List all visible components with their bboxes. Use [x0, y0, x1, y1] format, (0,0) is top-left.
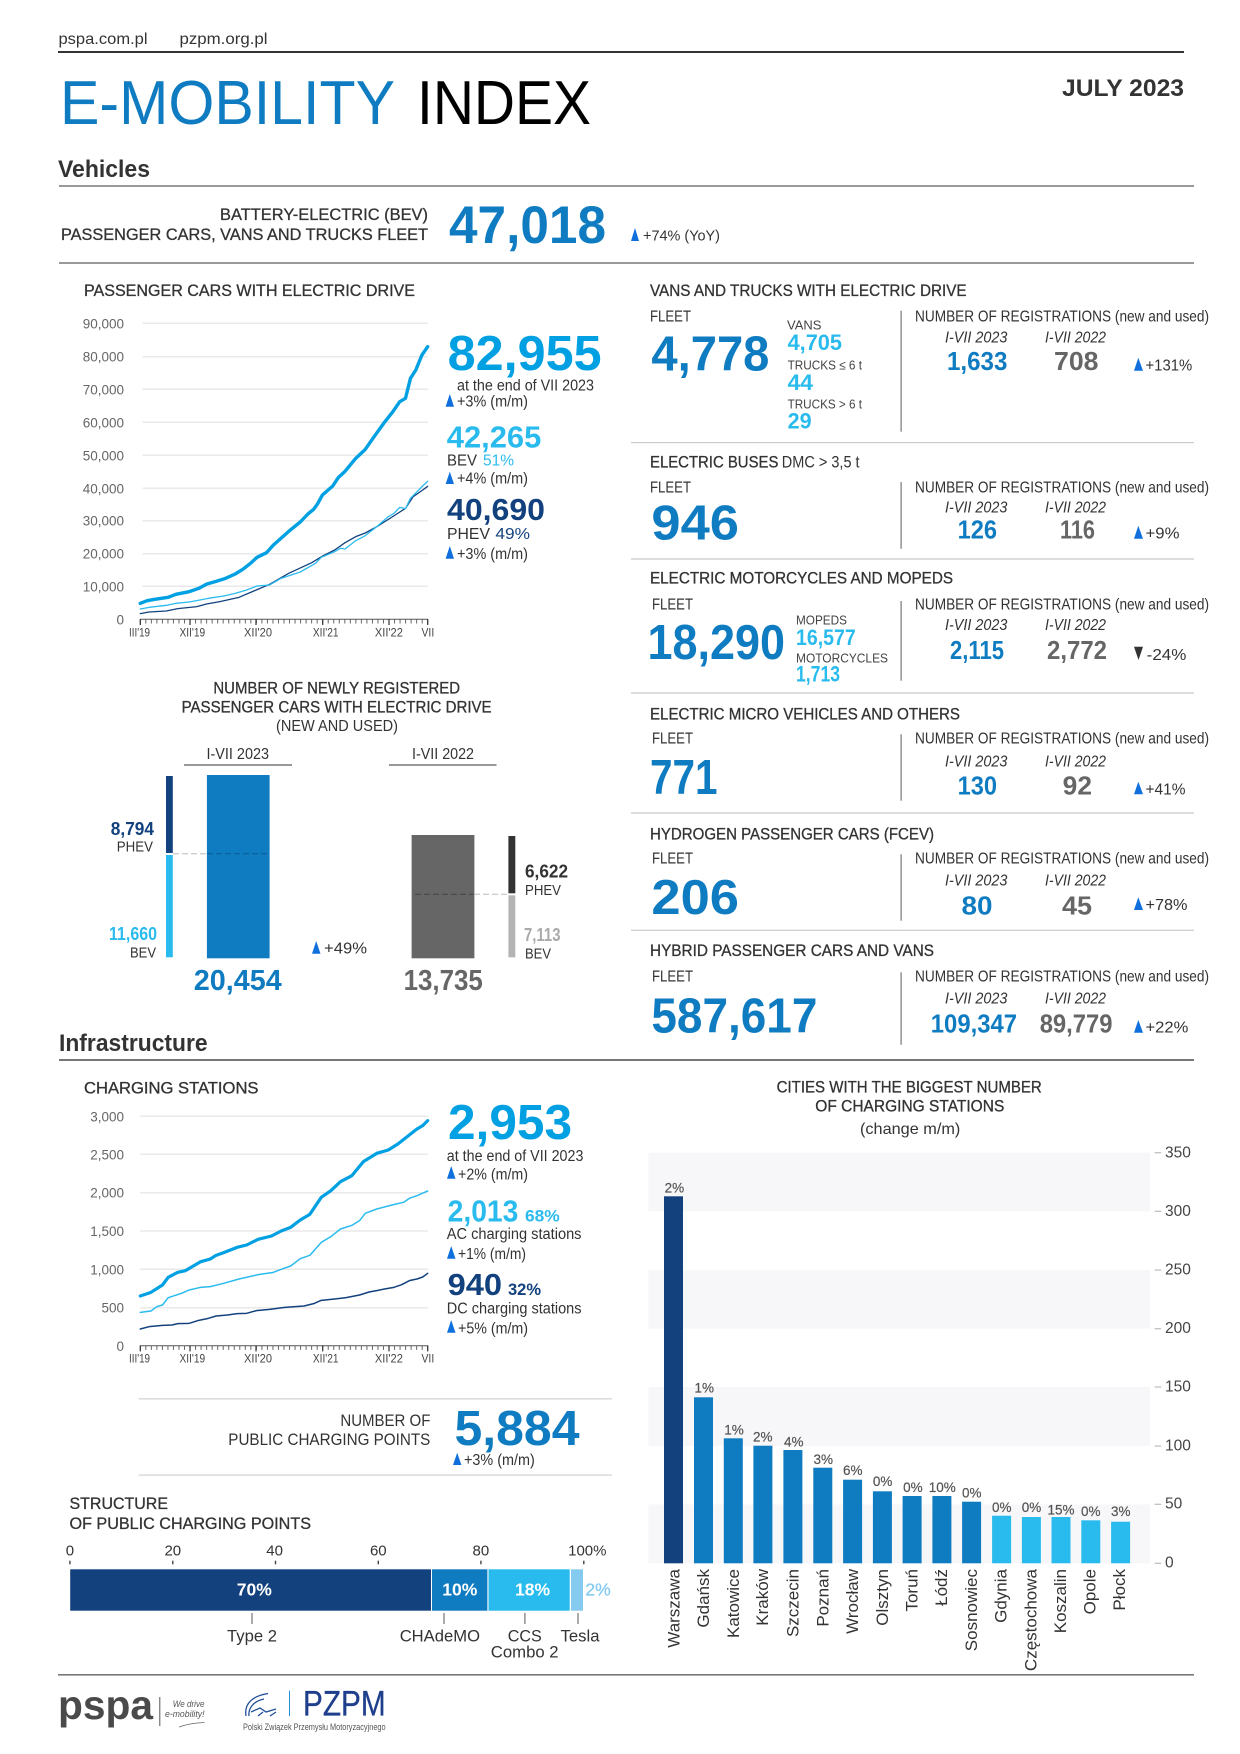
line chart: passenger cars: 40,000: [83, 481, 124, 496]
city names: Warszawa: [664, 1568, 684, 1648]
registrations: I-VII 2023: [945, 617, 1008, 634]
change labels: 0%: [873, 1474, 892, 1489]
title: INDEX: [417, 69, 591, 138]
logo: PSPA: pspa: [58, 1682, 154, 1728]
registrations: I-VII 2022: [1045, 872, 1106, 889]
stacked bar: 2%: [585, 1580, 611, 1600]
line chart: passenger cars: III'19: [129, 626, 150, 640]
city names: Łódź: [932, 1569, 951, 1606]
line chart: passenger cars: 50,000: [83, 448, 124, 463]
bars: I-VII 2023: 8,794: [111, 819, 154, 839]
change labels: 0%: [1081, 1504, 1101, 1519]
bar chart: cities: 250: [1165, 1262, 1191, 1279]
panel: vans and trucks: [650, 282, 1209, 433]
registrations: 1,633: [947, 346, 1007, 376]
city names: Kraków: [753, 1568, 772, 1626]
panel: vans and trucks: VANS AND TRUCKS WITH ELECTRIC DRIVE: [650, 282, 967, 300]
panel: hydrogen cars: [650, 825, 1209, 925]
change labels: 2%: [753, 1430, 773, 1445]
public charging points: [228, 1402, 580, 1469]
bars: I-VII 2022: 6,622: [525, 861, 568, 881]
bars: I-VII 2022: [389, 746, 568, 997]
city names: Opole: [1080, 1569, 1100, 1614]
change labels: 2%: [665, 1181, 684, 1196]
city names: Poznań: [814, 1569, 832, 1627]
panel: hydrogen cars: FLEET: [652, 850, 693, 867]
fleet breakdown: MOPEDS: [796, 612, 847, 627]
registrations: I-VII 2023: [945, 872, 1008, 889]
PHEV value: [446, 492, 545, 563]
line chart: passenger cars: XII'22: [375, 626, 403, 640]
panel: charging stations: [84, 1079, 583, 1366]
PHEV value: +3% (m/m): [457, 546, 528, 563]
line chart: charging stations: XII'20: [244, 1352, 272, 1366]
bar chart: cities: [648, 1145, 1191, 1671]
panel: hybrid cars and vans: FLEET: [652, 969, 693, 986]
logo: PSPA: We drive: [173, 1699, 204, 1709]
bar chart: cities: 50: [1165, 1496, 1183, 1513]
BEV fleet headline: [61, 196, 720, 255]
registrations: I-VII 2022: [1045, 990, 1106, 1007]
bar chart: cities: 150: [1165, 1378, 1191, 1396]
AC stations value: [447, 1194, 582, 1263]
bar chart: cities: 300: [1165, 1203, 1191, 1220]
registrations: [915, 309, 1209, 376]
bars: I-VII 2022: I-VII 2022: [412, 746, 474, 763]
stacked bar: 18%: [515, 1580, 550, 1600]
line chart: charging stations: 0: [116, 1339, 124, 1354]
change labels: 1%: [724, 1422, 744, 1437]
line chart: charging stations: 2,000: [90, 1186, 124, 1201]
DC stations value: +5% (m/m): [458, 1320, 528, 1337]
logo: PZPM: Polski Związek Przemysłu Motoryzacyjnego: [243, 1722, 386, 1732]
BEV fleet headline: BATTERY-ELECTRIC (BEV): [220, 206, 428, 224]
panel: micro vehicles: [650, 705, 1209, 805]
registrations: +9%: [1146, 526, 1180, 543]
stacked bar: [70, 1569, 611, 1611]
panel: newly registered passenger cars: NUMBER OF NEWLY REGISTERED: [213, 679, 460, 697]
line chart: charging stations: 2,500: [90, 1147, 124, 1162]
line chart: passenger cars: 20,000: [83, 547, 124, 562]
panel: motorcycles and mopeds: ELECTRIC MOTORCYCLES AND MOPEDS: [650, 569, 953, 587]
fleet breakdown: [796, 612, 888, 687]
registrations: [915, 969, 1209, 1039]
city names: Szczecin: [784, 1569, 802, 1637]
AC stations value: 68%: [525, 1207, 560, 1226]
registrations: I-VII 2022: [1045, 329, 1106, 346]
change labels: [665, 1181, 1130, 1519]
panel: hybrid cars and vans: 587,617: [651, 990, 817, 1044]
AC stations value: AC charging stations: [447, 1226, 582, 1243]
panel: structure of public charging points: STRUCTURE: [70, 1495, 168, 1513]
panel: passenger cars with electric drive: [83, 282, 602, 640]
change labels: 0%: [962, 1486, 982, 1501]
axis: 80: [473, 1543, 489, 1560]
city names: Gdynia: [992, 1568, 1010, 1623]
panel: electric buses: 946: [651, 496, 739, 550]
DC stations value: 940: [448, 1267, 502, 1302]
registrations: [915, 596, 1209, 665]
fleet breakdown: [787, 317, 862, 433]
registrations: 126: [958, 515, 997, 545]
registrations: I-VII 2022: [1045, 753, 1106, 770]
change labels: 4%: [784, 1435, 804, 1450]
registrations: 116: [1060, 515, 1095, 545]
registrations: I-VII 2023: [945, 990, 1008, 1007]
line chart: passenger cars: VII: [422, 626, 434, 640]
panel: newly registered passenger cars: PASSENGER CARS WITH ELECTRIC DRIVE: [182, 698, 492, 716]
panel: cities with the biggest number of charging stations: (change m/m): [860, 1121, 960, 1138]
registrations: +131%: [1146, 358, 1192, 375]
registrations: I-VII 2023: [945, 329, 1008, 346]
city names: Katowice: [724, 1569, 743, 1638]
panel: vans and trucks: FLEET: [650, 309, 691, 326]
panel: cities with the biggest number of charging stations: [648, 1079, 1191, 1671]
total fleet value: at the end of VII 2023: [457, 378, 594, 395]
BEV value: 51%: [483, 453, 514, 470]
line chart: passenger cars: 60,000: [83, 415, 124, 430]
bars: I-VII 2022: 13,735: [404, 965, 483, 997]
registrations: +78%: [1146, 897, 1188, 914]
title: E-MOBILITY: [60, 69, 395, 138]
BEV fleet headline: PASSENGER CARS, VANS AND TRUCKS FLEET: [61, 226, 428, 244]
line chart: passenger cars: 10,000: [83, 579, 124, 594]
line chart: charging stations: XII'21: [313, 1352, 339, 1366]
panel: micro vehicles: 771: [650, 751, 718, 805]
line chart: passenger cars: 80,000: [83, 350, 124, 365]
public charging points: NUMBER OF: [340, 1412, 430, 1430]
panel: hybrid cars and vans: HYBRID PASSENGER CARS AND VANS: [650, 942, 934, 960]
fleet breakdown: 44: [788, 370, 814, 395]
registrations: 109,347: [931, 1009, 1017, 1039]
registrations: 45: [1062, 890, 1092, 920]
city names: Częstochowa: [1022, 1568, 1040, 1671]
city names: Olsztyn: [873, 1569, 892, 1626]
fleet breakdown: TRUCKS > 6 t: [788, 396, 862, 411]
bars: I-VII 2023: 20,454: [194, 965, 282, 997]
bars: I-VII 2023: I-VII 2023: [206, 746, 269, 763]
registrations: 2,772: [1047, 635, 1107, 665]
total fleet value: [446, 327, 602, 411]
panel: electric buses: [650, 453, 1209, 550]
panel: cities with the biggest number of charging stations: OF CHARGING STATIONS: [815, 1098, 1004, 1116]
logo: PSPA: e-mobility!: [165, 1709, 205, 1719]
registrations: [915, 730, 1209, 800]
bar chart: cities: 350: [1165, 1145, 1191, 1162]
panel: hydrogen cars: 206: [651, 871, 739, 925]
logo: PZPM: PZPM: [303, 1685, 386, 1724]
growth indicator: +49%: [324, 941, 367, 958]
public charging points: 5,884: [454, 1402, 580, 1456]
registrations: 708: [1054, 346, 1098, 376]
heading: vehicles: Vehicles: [58, 156, 150, 183]
panel: newly registered passenger cars: (NEW AND USED): [276, 718, 398, 735]
stacked bar: 10%: [442, 1580, 478, 1600]
total fleet value: 82,955: [448, 327, 602, 381]
change labels: 1%: [695, 1380, 714, 1396]
registrations: +41%: [1146, 781, 1186, 798]
panel: charging stations: CHARGING STATIONS: [84, 1079, 258, 1097]
fleet breakdown: 16,577: [796, 625, 856, 650]
city names: Gdańsk: [694, 1569, 713, 1628]
fleet breakdown: MOTORCYCLES: [796, 650, 888, 665]
bars: I-VII 2023: BEV: [130, 944, 156, 961]
panel: passenger cars with electric drive: PASSENGER CARS WITH ELECTRIC DRIVE: [84, 282, 415, 300]
bars: I-VII 2022: BEV: [525, 945, 551, 962]
line chart: passenger cars: 30,000: [83, 514, 124, 529]
PHEV value: PHEV: [447, 526, 490, 543]
registrations: -24%: [1147, 647, 1186, 664]
line chart: charging stations: [90, 1109, 434, 1366]
change labels: 0%: [903, 1480, 923, 1495]
city names: Wrocław: [843, 1568, 862, 1634]
bars: [664, 1196, 1130, 1563]
bars: I-VII 2023: 11,660: [109, 924, 157, 944]
panel: structure of public charging points: OF PUBLIC CHARGING POINTS: [70, 1515, 311, 1533]
BEV value: +4% (m/m): [457, 470, 528, 487]
panel: motorcycles and mopeds: [648, 569, 1209, 687]
fleet breakdown: 4,705: [788, 330, 842, 355]
change labels: 3%: [814, 1452, 833, 1467]
bars: I-VII 2022: PHEV: [525, 882, 561, 899]
panel: hydrogen cars: HYDROGEN PASSENGER CARS (FCEV): [650, 825, 934, 843]
line chart: charging stations: 1,500: [90, 1224, 124, 1239]
total stations value: +2% (m/m): [458, 1166, 528, 1183]
line chart: charging stations: 3,000: [90, 1109, 124, 1124]
change labels: 10%: [929, 1480, 956, 1495]
fleet breakdown: 29: [788, 408, 812, 433]
connector labels: Type 2: [227, 1627, 277, 1646]
city names: Koszalin: [1051, 1569, 1070, 1633]
bars: I-VII 2023: [109, 746, 292, 997]
BEV fleet headline: 47,018: [449, 196, 606, 255]
BEV value: BEV: [447, 453, 477, 470]
fleet breakdown: VANS: [787, 317, 822, 332]
header links: pspa.com.pl: [58, 31, 148, 48]
connector labels: CCS: [508, 1627, 542, 1646]
bars: I-VII 2023: PHEV: [117, 839, 153, 856]
total stations value: at the end of VII 2023: [447, 1148, 583, 1165]
BEV value: [446, 419, 541, 487]
registrations: I-VII 2023: [945, 753, 1008, 770]
registrations: 89,779: [1040, 1009, 1112, 1039]
DC stations value: DC charging stations: [447, 1300, 582, 1317]
total stations value: [447, 1096, 583, 1183]
city names: Toruń: [902, 1569, 922, 1612]
bar chart: cities: 100: [1165, 1437, 1191, 1454]
panel: vans and trucks: 4,778: [651, 328, 769, 382]
change labels: 3%: [1111, 1504, 1130, 1519]
DC stations value: [447, 1267, 582, 1337]
bar chart: cities: 0: [1165, 1554, 1174, 1571]
change labels: 6%: [843, 1463, 863, 1478]
heading: infrastructure: Infrastructure: [59, 1030, 208, 1057]
panel: structure of public charging points: [66, 1495, 611, 1662]
BEV fleet headline: +74% (YoY): [643, 228, 720, 244]
change labels: 0%: [992, 1500, 1011, 1515]
change labels: 0%: [1022, 1500, 1041, 1515]
registrations: I-VII 2023: [945, 499, 1008, 516]
DC stations value: 32%: [508, 1280, 541, 1299]
registrations: [915, 850, 1209, 920]
line chart: charging stations: XII'22: [375, 1352, 403, 1366]
title: [60, 69, 591, 138]
panel: micro vehicles: FLEET: [652, 730, 693, 747]
line chart: passenger cars: 0: [116, 612, 124, 627]
BEV value: 42,265: [447, 419, 541, 454]
axis: 100%: [568, 1543, 606, 1560]
logo: PZPM: [243, 1685, 386, 1732]
panel: motorcycles and mopeds: 18,290: [648, 616, 785, 670]
line chart: passenger cars: [83, 316, 434, 640]
line chart: charging stations: VII: [422, 1352, 434, 1366]
total stations value: 2,953: [448, 1096, 572, 1150]
panel: electric buses: ELECTRIC BUSES: [650, 453, 778, 471]
axis: 0: [66, 1543, 74, 1560]
line chart: passenger cars: XII'20: [244, 626, 272, 640]
registrations: +22%: [1146, 1020, 1188, 1037]
city names: Sosnowiec: [962, 1569, 981, 1651]
axis: [66, 1543, 606, 1564]
date: JULY 2023: [1062, 75, 1184, 102]
line chart: charging stations: 500: [101, 1301, 124, 1316]
city names: Płock: [1110, 1569, 1129, 1611]
logo: PSPA: [58, 1682, 205, 1728]
panel: electric buses: DMC > 3,5 t: [782, 453, 860, 471]
change labels: 15%: [1047, 1502, 1075, 1517]
registrations: 2,115: [950, 635, 1004, 665]
line chart: charging stations: 1,000: [90, 1262, 124, 1277]
PHEV value: 40,690: [447, 492, 545, 527]
registrations: I-VII 2022: [1045, 499, 1106, 516]
header links: pzpm.org.pl: [180, 31, 268, 48]
fleet breakdown: 1,713: [796, 662, 840, 687]
registrations: [915, 480, 1209, 545]
header links: [58, 31, 268, 48]
panel: hybrid cars and vans: [650, 942, 1209, 1045]
registrations: 130: [958, 770, 997, 800]
city names: [664, 1568, 1129, 1671]
line chart: passenger cars: XII'21: [313, 626, 339, 640]
connector labels: CHAdeMO: [400, 1627, 480, 1646]
registrations: 92: [1063, 770, 1092, 800]
panel: cities with the biggest number of charging stations: CITIES WITH THE BIGGEST NUMBER: [777, 1079, 1042, 1097]
axis: 60: [370, 1543, 387, 1560]
bar chart: cities: 200: [1165, 1320, 1191, 1337]
registrations: I-VII 2022: [1045, 617, 1106, 634]
panel: micro vehicles: ELECTRIC MICRO VEHICLES AND OTHERS: [650, 705, 960, 723]
panel: electric buses: FLEET: [650, 480, 691, 497]
total fleet value: +3% (m/m): [457, 394, 528, 411]
PHEV value: 49%: [495, 526, 530, 543]
connector labels: Combo 2: [491, 1643, 559, 1662]
fleet breakdown: TRUCKS ≤ 6 t: [788, 357, 862, 372]
public charging points: PUBLIC CHARGING POINTS: [228, 1431, 430, 1449]
bars: I-VII 2022: 7,113: [524, 925, 560, 945]
axis: 40: [266, 1543, 283, 1560]
line chart: passenger cars: 70,000: [83, 382, 124, 397]
line chart: passenger cars: 90,000: [83, 316, 124, 331]
public charging points: +3% (m/m): [464, 1452, 535, 1469]
stacked bar: 70%: [237, 1580, 272, 1600]
AC stations value: 2,013: [448, 1194, 518, 1229]
axis: 20: [164, 1543, 181, 1560]
line chart: charging stations: XII'19: [180, 1352, 205, 1366]
AC stations value: +1% (m/m): [458, 1246, 526, 1263]
line chart: passenger cars: XII'19: [180, 626, 205, 640]
connector labels: Tesla: [560, 1627, 600, 1646]
panel: newly registered passenger cars: [109, 679, 568, 997]
connector labels: [227, 1613, 600, 1662]
line chart: charging stations: III'19: [129, 1352, 150, 1366]
panel: motorcycles and mopeds: FLEET: [652, 596, 693, 613]
registrations: 80: [962, 890, 992, 920]
